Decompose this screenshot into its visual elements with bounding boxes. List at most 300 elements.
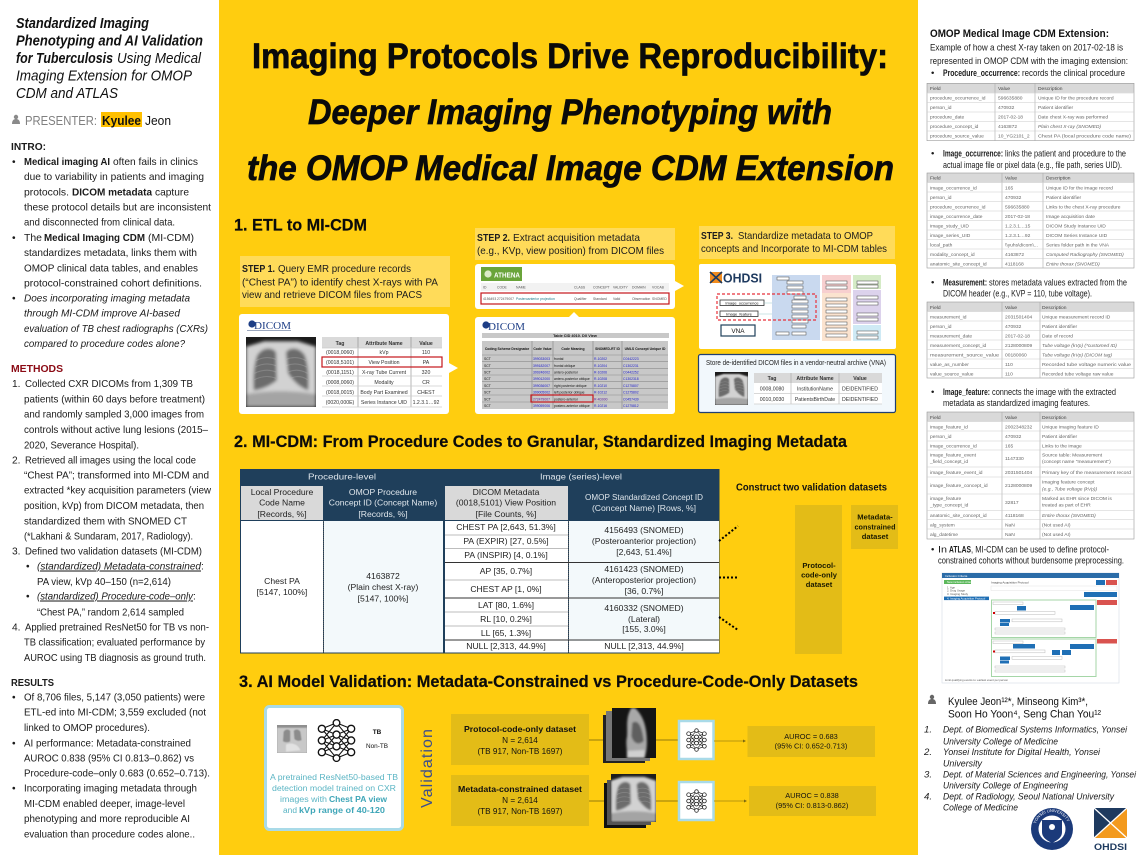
icon: neural network (318, 720, 355, 761)
model description: detection model trained on CXR (272, 784, 396, 793)
results section: evaluation than procedure codes alone.. (24, 830, 195, 840)
table: image_occurrence: person_id (930, 195, 952, 201)
table: procedure-level to image-level mapping: CHEST PA [2,643, 51.3%] (456, 522, 556, 532)
x-ray: AP (738, 554, 785, 602)
methods section: Collected CXR DICOMs from 1,309 TB (25, 379, 193, 390)
VNA box: VNA (731, 328, 745, 335)
table: procedure_occurrence: Patient identifier (1038, 105, 1073, 111)
card: DICOM view table: SCT (484, 357, 491, 361)
table: image_occurrence: procedure_occurrence_id (930, 204, 986, 210)
intro section: through MI-CDM improve AI-based (24, 308, 180, 320)
table: measurement: 2017-02-18 (1005, 334, 1030, 340)
table: procedure-level to image-level mapping: [Records, %] (257, 509, 307, 519)
box: protocol-code-only dataset (451, 714, 589, 765)
screenshot: ATLAS cohort definition: Limit qualifying events to: earliest event per person (945, 678, 1008, 682)
results section: phenotyping and more reproducible AI (24, 814, 190, 825)
logo: DICOM: DICOM (488, 321, 525, 333)
table: procedure_occurrence: Field (930, 86, 941, 92)
card: ATHENA search: NAME (516, 286, 527, 290)
intro section: DICOM metadata (72, 188, 152, 198)
presenter line: Jeon (145, 114, 171, 128)
intro section: (MI-CDM) (148, 233, 194, 244)
card: DICOM view table: 399012000 (533, 377, 550, 381)
table: procedure_occurrence: procedure_source_value (930, 134, 984, 140)
table: procedure-level to image-level mapping: PA (INSPIR) [4, 0.1%] (464, 550, 548, 560)
output labels (366, 729, 388, 750)
table: procedure-level to image-level mapping: Concept ID (Concept Name) (329, 498, 437, 508)
card: ATHENA search: SNOMED (652, 297, 667, 301)
table: measurement: measurement_source_value (930, 352, 999, 358)
table: image_occurrence: Field (930, 176, 941, 182)
affiliations: 2. (923, 747, 932, 758)
image_occurrence description: Image_occurrence: (943, 148, 1003, 160)
table: image_feature: Field (930, 415, 941, 421)
card: DICOM view table: C1302318 (623, 377, 639, 381)
title: Imaging Protocols Drive Reproducibility: (252, 37, 888, 76)
table: procedure-level to image-level mapping: Code Name (259, 498, 305, 508)
intro section: INTRO: (11, 142, 46, 153)
methods section: : (193, 592, 196, 602)
intro section: Medical Imaging CDM (44, 233, 145, 244)
card: DICOM view table: SCT (484, 364, 491, 368)
box: metadata-constrained dataset: dataset (862, 532, 889, 541)
icon: network card (679, 721, 714, 759)
poster subtitle: for Tuberculosis (16, 50, 113, 67)
methods section: AUROC using TB diagnosis as ground truth. (24, 653, 206, 664)
poster subtitle: Using Medical (117, 50, 202, 67)
table: measurement: Tube voltage (kVp) (DICOM tag) (1042, 352, 1112, 358)
table: image_occurrence: Entire thorax (SNOMED) (1046, 262, 1100, 268)
table: image_occurrence: image_occurrence_id (930, 186, 977, 192)
logo: Yonsei University (1031, 808, 1073, 850)
table: procedure-level to image-level mapping (240, 469, 720, 654)
heading: section 2: 2. MI-CDM: From Procedure Codes to Granular, Standardized Imaging Metadata (234, 433, 848, 451)
table: image_feature: Unique imaging feature ID (1042, 424, 1099, 430)
table: image_occurrence: image_series_UID (930, 233, 971, 239)
table: procedure-level to image-level mapping: PA (EXPIR) [27, 0.5%] (463, 536, 549, 546)
card: VNA de-identification: Tag (768, 376, 776, 382)
table: procedure_occurrence: 470932 (998, 105, 1015, 111)
ATLAS description: ATLAS (949, 544, 971, 556)
intro section: • (12, 157, 16, 168)
table: measurement: 2128000809 (1005, 343, 1032, 349)
attribute table: (0018,5101) (326, 360, 354, 366)
table: procedure-level to image-level mapping: [5147, 100%] (358, 594, 408, 604)
affiliations: University College of Medicine (943, 736, 1058, 748)
screenshot: ATLAS cohort definition: 2. Drug Usage (947, 588, 965, 592)
attribute table: 110 (422, 350, 430, 356)
card: DICOM view table: C1275807 (623, 384, 639, 388)
table: image_occurrence: 1.2.3.1…15 (1005, 224, 1031, 230)
card: DICOM view table: SCT (484, 391, 491, 395)
logo: DICOM: DICOM (254, 320, 291, 332)
red dashed MI-CDM highlight: Image_occurrence (725, 300, 759, 306)
table: procedure-level to image-level mapping: (Concept Name) [Rows, %] (592, 503, 696, 513)
table: image_feature: alg_system (930, 522, 955, 528)
card: DICOM view table: antero-posterior (554, 371, 579, 375)
table: procedure_occurrence: 596635880 (998, 96, 1023, 102)
model description: Chest PA view (329, 795, 388, 804)
attribute table: View Position (368, 360, 400, 366)
step 3 description: STEP 3. (701, 231, 733, 242)
table: image_feature: person_id (930, 434, 952, 440)
card: ATHENA search: VALIDITY (613, 286, 629, 290)
heading: section 3: 3. AI Model Validation: Metadata-Constrained vs Procedure-Code-Only Datasets (239, 673, 858, 691)
card: DICOM view table: SCT (484, 384, 491, 388)
box: protocol-code-only dataset: (TB 917, Non-TB 1697) (477, 747, 563, 756)
intro section: Does incorporating imaging metadata (24, 294, 190, 304)
table: procedure_occurrence: procedure_concept_id (930, 124, 979, 130)
table: image_feature: 1147330 (1005, 456, 1024, 462)
panel: step 1 (239, 256, 458, 414)
results section: MI-CDM enabled deeper, image-level (24, 799, 185, 810)
poster subtitle: Phenotyping and AI Validation (16, 32, 203, 50)
table: image_occurrence (927, 173, 1134, 268)
table: image_feature: Primary key of the measurement record (1042, 470, 1131, 476)
attribute table: (0020,000E) (326, 400, 355, 406)
card: DICOM view table: 272479007 (533, 398, 550, 402)
table: measurement: measurement_concept_id (930, 343, 987, 349)
table: image_occurrence: \\yuhs\dicom\... (1005, 242, 1038, 248)
methods section: 2. (12, 456, 20, 466)
affiliations (923, 724, 1137, 814)
card: DICOM view table: C0442252 (623, 371, 639, 375)
card: VNA de-identification: 0008,0080 (760, 386, 784, 392)
table: procedure-level to image-level mapping: 4161423 (SNOMED) (604, 564, 684, 574)
card: ATHENA search: Observation (632, 297, 650, 301)
card: DICOM view table: left posterior oblique (554, 391, 585, 395)
card: DICOM view table: SCT (484, 398, 491, 402)
table: procedure_occurrence: Unique ID for the procedure record (1038, 96, 1114, 102)
card: DICOM view table: SNOMED-RT ID (595, 347, 620, 351)
table: image_feature: _type_concept_id (929, 502, 969, 508)
box: metadata-constrained dataset: Metadata-constrained dataset (458, 785, 582, 794)
card: ATHENA search: Qualifier (574, 297, 587, 301)
authors: Soon Ho Yoon⁴, Seng Chan You¹² (948, 708, 1101, 720)
table: procedure-level to image-level mapping: (0018,5101) View Position (456, 498, 556, 508)
output labels: Non-TB (366, 743, 388, 750)
VNA box (721, 325, 755, 336)
table: measurement (927, 302, 1134, 378)
table: procedure_occurrence: person_id (930, 105, 952, 111)
attribute table: (0018,1151) (326, 370, 354, 376)
heading: section 1: 1. ETL to MI-CDM (234, 216, 367, 234)
methods section: TB classification; evaluated performance by (24, 638, 206, 648)
attribute table: (0018,0015) (326, 390, 354, 396)
methods section: 4. (12, 622, 20, 634)
measurement description (931, 278, 1127, 300)
card: ATHENA search: 4156493 (483, 297, 496, 301)
step 1 description: view and retrieve DICOM files from PACS (242, 290, 422, 301)
logo: OHDSI (1094, 808, 1127, 852)
table: image_occurrence: 470932 (1005, 195, 1022, 201)
table: image_occurrence: Image acquisition date (1046, 214, 1095, 220)
table: image_occurrence: Series folder path in the VNA (1046, 242, 1110, 248)
step 1 description: (“Chest PA”) to identify chest X-rays with PA (242, 278, 438, 288)
intro section: protocol-constrained cohort definitions. (24, 278, 202, 290)
results section: Procedure-code–only 0.683 (0.652–0.713). (24, 768, 210, 780)
logo: ATHENA: ATHENA (494, 270, 520, 280)
image_feature description: Image_feature: (943, 387, 990, 398)
panel: construct validation datasets (719, 482, 898, 654)
panel: step 3 (698, 226, 896, 412)
red dashed MI-CDM highlight: Image_feature (726, 312, 753, 316)
screenshot: ATLAS cohort definition: 4. Imaging Acquisition Protocol (947, 596, 986, 600)
screenshot: ATLAS cohort definition: Imaging Acquisition Protocol (991, 580, 1029, 584)
box: AUROC 0.838: AUROC = 0.838 (785, 791, 839, 800)
table: image_feature: 2031501404 (1005, 470, 1032, 476)
presenter line: Kyulee (102, 114, 141, 128)
results section: linked to OMOP procedures). (24, 723, 150, 734)
card: ATHENA search: CONCEPT (593, 286, 610, 290)
table: image_feature: 32817 (1005, 500, 1019, 506)
step 2 description: Extract acquisition metadata (513, 233, 640, 244)
logo: Yonsei University: YONSEI UNIVERSITY (1033, 809, 1070, 823)
model description (270, 773, 398, 815)
table: procedure-level to image-level mapping: DICOM Metadata (473, 487, 540, 497)
box: AUROC 0.683: (95% CI: 0.652-0.713) (775, 742, 847, 750)
step 2 description (475, 228, 675, 260)
presenter line: PRESENTER: (25, 114, 97, 128)
methods section: METHODS (11, 364, 63, 375)
card: ATHENA search: 272479007 (497, 297, 514, 301)
card: DICOM view table: 399005002 (533, 391, 550, 395)
methods section: Applied pretrained ResNet50 for TB vs non- (25, 622, 209, 634)
card: DICOM view table: 399059006 (533, 404, 550, 408)
table: image_occurrence: Description (1046, 176, 1071, 182)
table: measurement: 110 (1005, 362, 1013, 368)
table: measurement: 470932 (1005, 324, 1022, 330)
box: protocol-code-only dataset: code-only (801, 570, 838, 580)
table: measurement: 110 (1005, 372, 1013, 378)
table: measurement: measurement_date (930, 334, 972, 340)
methods section: • (26, 592, 30, 602)
table: procedure-level to image-level mapping: 4163872 (366, 571, 400, 581)
card: DICOM view table: postero-anterior oblique (554, 404, 590, 408)
intro section: protocols. (24, 188, 69, 198)
intro section: • (12, 294, 16, 304)
step 1 description: Query EMR procedure records (278, 264, 411, 275)
table: image_feature: 4118168 (1005, 513, 1024, 519)
table: procedure-level to image-level mapping: Procedure-level (308, 472, 376, 482)
methods section: PA view, kVp 40–150 (n=2,614) (37, 577, 171, 588)
logo: OHDSI: OHDSI (723, 272, 762, 286)
table: procedure-level to image-level mapping: (Lateral) (628, 614, 660, 624)
results section: Incorporating imaging metadata through (24, 784, 197, 794)
table: procedure_occurrence: procedure_occurrence_id (930, 96, 986, 102)
card: ATHENA search: Posteroanterior projection (516, 297, 555, 301)
card: ATHENA search: ID (483, 286, 487, 290)
intro section: standardizes metadata, links them with (24, 248, 197, 259)
row: metadata-constrained validation (451, 774, 876, 828)
table: image_feature: (Not used AI) (1042, 522, 1071, 528)
table: procedure-level to image-level mapping: OMOP Standardized Concept ID (585, 492, 703, 502)
intro section: Medical imaging AI (24, 157, 110, 168)
panel: step 2 (475, 228, 684, 414)
box: protocol-code-only dataset: Protocol-code-only dataset (464, 725, 576, 734)
measurement description: DICOM header (e.g., KVP = 110, tube voltage). (943, 288, 1092, 300)
card: DICOM view table: frontal (554, 357, 564, 361)
box: AUROC 0.838 (749, 786, 876, 816)
methods section: • (26, 562, 30, 572)
table: image_occurrence: modality_concept_id (930, 252, 975, 258)
table: procedure_occurrence: 10_YG2101_2 (998, 134, 1030, 140)
attribute table: Value (419, 341, 433, 347)
table: procedure-level to image-level mapping: OMOP Procedure (349, 487, 417, 497)
screenshot: ATLAS cohort definition: 3. Imaging Study (947, 592, 969, 596)
card: DICOM view table: SCT (484, 404, 491, 408)
image stack: lateral (603, 708, 656, 763)
table: image_occurrence: image_study_UID (930, 224, 969, 230)
card: ATHENA search: Standard (593, 297, 607, 301)
affiliations: Dept. of Radiology, Seoul National University (943, 792, 1115, 802)
table: image_feature: 165 (1005, 444, 1013, 450)
table: measurement: person_id (930, 324, 952, 330)
table: image_occurrence: 596635880 (1005, 204, 1030, 210)
intro section: The (24, 233, 42, 244)
measurement description: Measurement: (943, 278, 987, 288)
methods section: “Chest PA,” random 2,614 sampled (37, 608, 184, 618)
methods section: standardized them with SNOMED CT (24, 516, 187, 528)
methods section: extracted *key acquisition parameters (view (24, 486, 212, 496)
logo: OHDSI: OHDSI (1094, 842, 1127, 852)
table: image_feature (927, 412, 1134, 539)
screenshot: ATLAS cohort definition (942, 573, 1119, 683)
table: image_feature: Patient identifier (1042, 434, 1077, 440)
intro section: compared to procedure codes alone? (24, 339, 185, 350)
table: image_feature: 470932 (1005, 434, 1022, 440)
step 2 description: STEP 2. (477, 233, 510, 244)
panel: right column (923, 28, 1137, 852)
screenshot: ATLAS cohort definition: Inclusion Criteria (945, 574, 968, 578)
table: measurement: Unique measurement record ID (1042, 314, 1111, 320)
table: image_feature: NaN (1005, 532, 1015, 538)
authors: Kyulee Jeon¹²*, Minseong Kim³*, (948, 696, 1088, 708)
card: ATHENA search: DOMAIN (632, 286, 646, 290)
methods section: (standardized) Procedure-code–only (37, 592, 194, 602)
table: measurement: measurement_id (930, 314, 967, 320)
box: metadata-constrained dataset: (TB 917, Non-TB 1697) (477, 807, 563, 816)
image_feature description (931, 387, 1116, 409)
card: VNA de-identification (698, 354, 896, 412)
table: image_occurrence: 1.2.3.1…92 (1005, 233, 1031, 239)
card: DICOM view table: postero-anterior (554, 398, 579, 402)
table: image_feature: alg_datetime (930, 532, 958, 538)
methods section: 1. (12, 379, 20, 390)
intro section: OMOP clinical data tables, and enables (24, 264, 198, 274)
poster subtitle (16, 15, 203, 102)
table: measurement: Patient identifier (1042, 324, 1077, 330)
attribute table (322, 337, 442, 407)
card: DICOM view table: 399182007 (533, 364, 550, 368)
affiliations: 3. (924, 770, 932, 780)
table: procedure-level to image-level mapping: [Records, %] (358, 509, 408, 519)
table: image_feature: (Not used AI) (1042, 532, 1071, 538)
card: DICOM view table: C1302231 (623, 364, 639, 368)
table: measurement: Date of record (1042, 334, 1073, 340)
card: DICOM view table: R-10208 (594, 377, 607, 381)
table: image_feature: 2002348232 (1005, 424, 1032, 430)
row: protocol-code-only validation (451, 708, 875, 765)
methods section (11, 364, 212, 664)
methods section: controls without active lung lesions (2015– (24, 425, 208, 436)
card: VNA de-identification: Value (853, 376, 867, 382)
card: DICOM view table: R-10204 (594, 364, 607, 368)
poster subtitle: CDM and ATLAS (16, 85, 118, 102)
card: DICOM view table: SCT (484, 371, 491, 375)
box: AUROC 0.838: (95% CI: 0.813-0.862) (776, 801, 848, 810)
authors (928, 695, 1101, 720)
table: image_occurrence: 4163872 (1005, 252, 1024, 258)
card: DICOM view table: SCT (484, 377, 491, 381)
card: DICOM view table: frontal oblique (554, 364, 575, 368)
card: VNA de-identification: DEIDENTIFIED (842, 397, 878, 403)
intro section: evaluation of TB chest radiographs (CXRs) (24, 324, 208, 335)
box: metadata-constrained dataset: Metadata- (857, 512, 893, 522)
card: ATHENA search (475, 264, 684, 309)
screenshot: ATLAS cohort definition: New inclusion criteria (947, 580, 974, 584)
card: ATHENA search: Valid (613, 297, 620, 301)
methods section: 3. (12, 546, 20, 558)
icon: network card (679, 782, 714, 820)
methods section: position, kVp) from DICOM metadata, then (24, 501, 204, 512)
x-ray: PA (738, 502, 785, 549)
model description: A pretrained ResNet50-based TB (270, 773, 398, 782)
table: procedure_occurrence: Date chest X-ray was performed (1038, 114, 1108, 120)
image_occurrence description (931, 148, 1126, 171)
table: image_feature: image_feature (930, 496, 962, 502)
results section: • (12, 738, 16, 750)
image stack: PA (604, 774, 656, 828)
table: image_occurrence: DICOM Study Instance UID (1046, 224, 1106, 230)
output labels: TB (373, 729, 382, 736)
table: measurement: Recorded tube voltage raw value (1042, 372, 1114, 378)
box: metadata-constrained dataset: constrained (854, 522, 896, 532)
box: protocol-code-only dataset: N = 2,614 (502, 736, 538, 745)
methods section: : (201, 562, 204, 572)
table: procedure-level to image-level mapping: [2,643, 51.4%] (616, 547, 672, 557)
table: image_occurrence: Links to the chest X-ray procedure (1046, 204, 1121, 210)
table: image_feature: 2128000809 (1005, 483, 1032, 489)
table: measurement: 00180060 (1005, 352, 1027, 358)
intro section: capture (155, 188, 189, 198)
card: OHDSI data model (699, 264, 896, 349)
step 1 description (240, 256, 450, 307)
step 3 description: concepts and Incorporate to MI-CDM tables (701, 244, 887, 255)
model description: and (283, 806, 297, 815)
card: DICOM view table: Code Meaning (561, 347, 585, 351)
poster subtitle: Imaging Extension for OMOP (16, 68, 192, 84)
card: DICOM view table: R-10206 (594, 371, 607, 375)
step 3 description: Standardize metadata to OMOP (738, 231, 873, 242)
table: image_feature: Source table: Measurement (1042, 452, 1103, 458)
table: image_feature: NaN (1005, 522, 1015, 528)
box: protocol-code-only dataset: dataset (806, 580, 833, 589)
logo: ATHENA (481, 267, 522, 281)
extension intro: OMOP Medical Image CDM Extension: (930, 28, 1109, 40)
model description: images with (280, 795, 327, 804)
table: image_occurrence: 4118168 (1005, 262, 1024, 268)
table: image_occurrence: Unique ID for the image record (1046, 186, 1113, 192)
table: image_occurrence: DICOM Series Instance UID (1046, 233, 1108, 239)
table: image_feature: (e.g., Tube voltage (kVp)) (1042, 486, 1097, 492)
table: image_feature: Description (1042, 415, 1067, 421)
table: procedure-level to image-level mapping: CHEST AP [1, 0%] (470, 584, 542, 594)
ATLAS description: In (938, 544, 947, 556)
table: image_feature: Marked as EHR since DICOM is (1042, 496, 1112, 502)
measurement description: • (931, 278, 934, 288)
x-ray: lateral (738, 607, 785, 654)
